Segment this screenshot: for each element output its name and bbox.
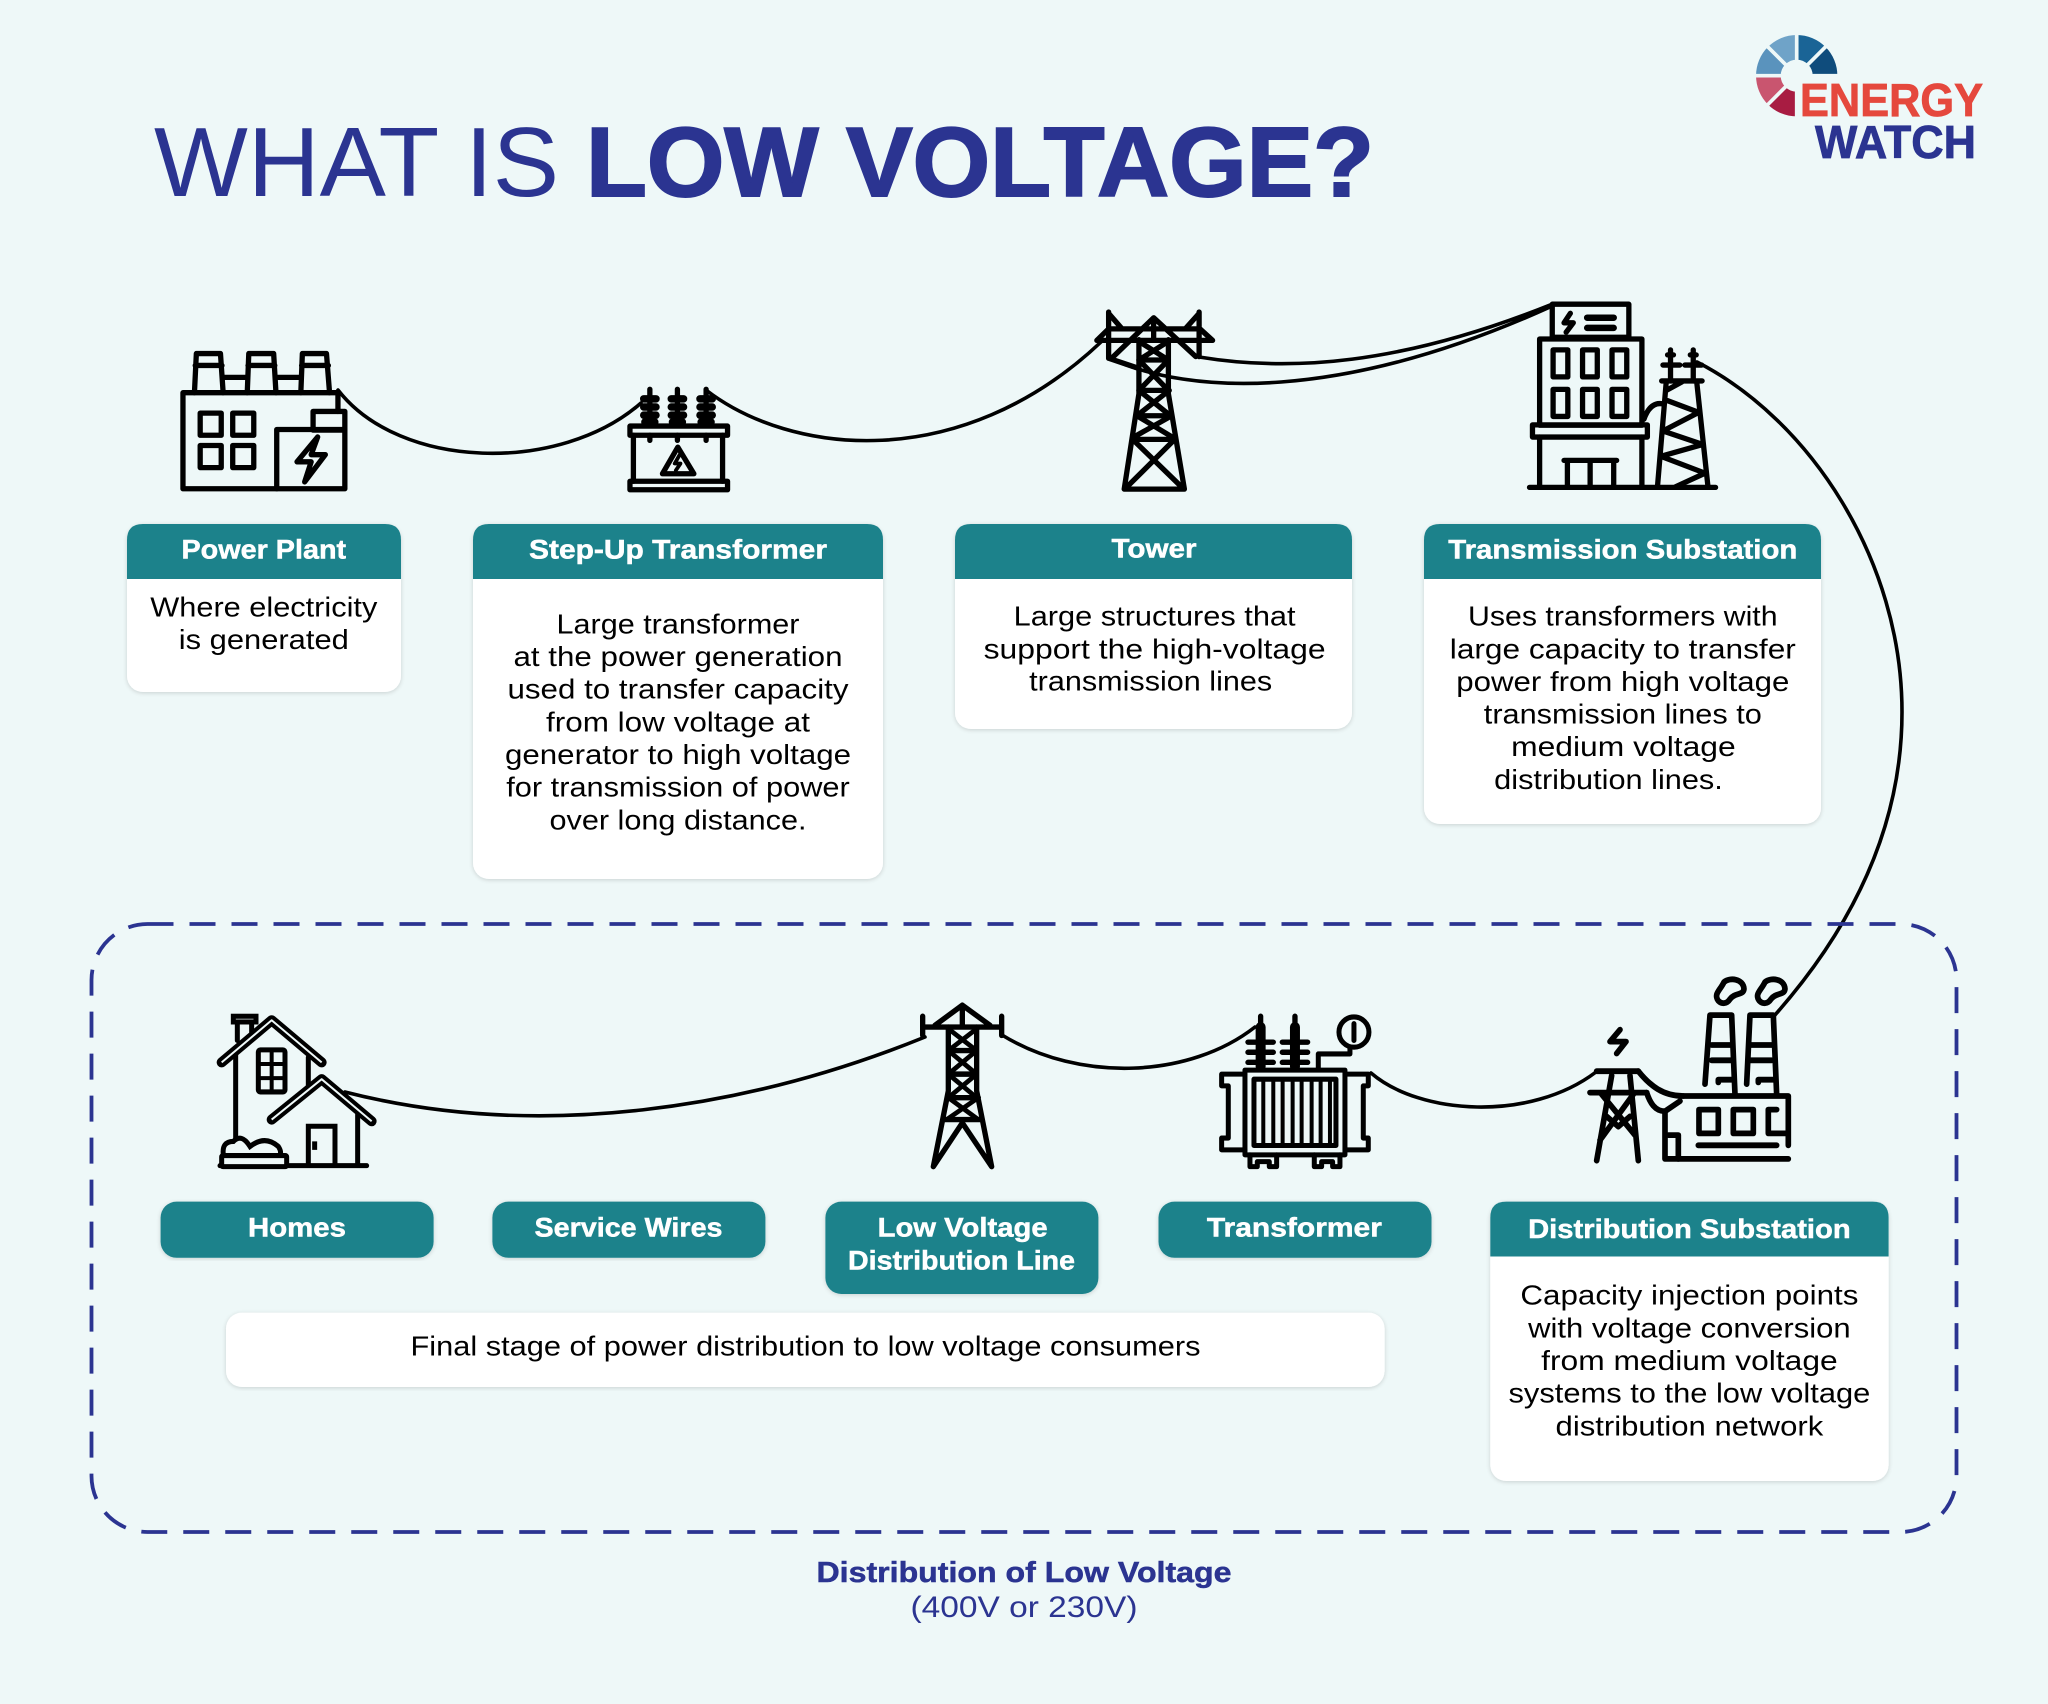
wire: power plant to step-up transformer (338, 390, 641, 453)
label: transformer: Transformer (1207, 1213, 1382, 1243)
text: step-up transformer description: for transmission of power (506, 772, 850, 803)
text: step-up transformer description (505, 609, 851, 835)
label: low voltage distribution line: Distribution Line (848, 1246, 1075, 1276)
text: distribution substation description: systems to the low voltage (1508, 1378, 1870, 1409)
text: step-up transformer description: generator to high voltage (505, 739, 851, 770)
wires: tower to transmission substation (1109, 305, 1550, 383)
heading: tower: Tower (1112, 534, 1197, 564)
logo ring icon (1753, 32, 1840, 119)
text: power plant description: is generated (179, 624, 349, 655)
text: tower description: Large structures that (1014, 601, 1296, 632)
text: tower description (984, 601, 1326, 697)
text: tower description: transmission lines (1029, 666, 1272, 697)
text: distribution substation description (1508, 1280, 1870, 1441)
icon: transmission substation (1530, 304, 1716, 487)
text: distribution substation description: Capacity injection points (1520, 1280, 1858, 1311)
icon: step-up transformer (630, 389, 728, 490)
text: transmission substation description: medium voltage (1511, 731, 1736, 762)
caption: distribution of low voltage: (400V or 230V) (910, 1591, 1138, 1624)
wire: step-up transformer to tower (706, 342, 1101, 441)
title: WHAT IS (154, 107, 559, 217)
text: transmission substation description: large capacity to transfer (1450, 633, 1796, 664)
label: homes: Homes (248, 1213, 346, 1243)
panel: distribution of low voltage dashed boundary (92, 924, 1956, 1532)
logo: Energy Watch: WATCH (1815, 116, 1976, 168)
title (154, 107, 1374, 217)
caption: distribution of low voltage (816, 1557, 1232, 1624)
text: transmission substation description: power from high voltage (1456, 666, 1789, 697)
wire: distribution substation to transformer (1371, 1072, 1596, 1107)
panel: transmission substation (1424, 524, 1821, 824)
text: transmission substation description: distribution lines. (1494, 764, 1723, 795)
title: LOW VOLTAGE? (586, 107, 1374, 217)
text: transmission substation description: Uses transformers with (1468, 601, 1778, 632)
icon: tower (1097, 312, 1213, 489)
text: power plant description (150, 592, 377, 655)
text: step-up transformer description: used to transfer capacity (508, 674, 848, 705)
label: service wires: Service Wires (534, 1213, 722, 1243)
heading: power plant: Power Plant (182, 535, 346, 565)
text: distribution substation description: distribution network (1556, 1410, 1824, 1441)
text: transmission substation description: transmission lines to (1484, 699, 1762, 730)
text: tower description: support the high-voltage (984, 633, 1326, 664)
logo: Energy Watch: ENERGY (1800, 74, 1983, 126)
label: low voltage distribution line: Low Voltage (878, 1213, 1048, 1243)
label: service wires (492, 1202, 765, 1258)
heading: step-up transformer: Step-Up Transformer (529, 535, 828, 565)
panel: power plant (127, 524, 401, 692)
heading: distribution substation: Distribution Substation (1528, 1214, 1851, 1244)
panel: tower (955, 524, 1352, 729)
panel: distribution substation (1490, 1202, 1889, 1481)
text: step-up transformer description: from low voltage at (546, 706, 810, 737)
wire: transmission substation to distribution substation (1697, 362, 1902, 1015)
label: transformer (1158, 1202, 1432, 1258)
wire: low voltage tower to homes (345, 1037, 925, 1116)
icon: power plant (183, 354, 345, 489)
text: distribution substation description: from medium voltage (1541, 1345, 1838, 1376)
text: power plant description: Where electricity (150, 592, 377, 623)
icon: transformer (1222, 1016, 1369, 1167)
icon: low voltage tower (923, 1005, 1002, 1167)
text: transmission substation description (1450, 601, 1796, 795)
text: step-up transformer description: over long distance. (550, 804, 806, 835)
icon: distribution substation (1590, 979, 1788, 1161)
text: step-up transformer description: at the power generation (514, 641, 842, 672)
text: distribution substation description: with voltage conversion (1527, 1313, 1851, 1344)
logo: Energy Watch (1753, 32, 1983, 168)
callout: final stage description: Final stage of power distribution to low voltage consumers (410, 1331, 1200, 1362)
panel: step-up transformer (473, 524, 883, 879)
caption: distribution of low voltage: Distribution of Low Voltage (816, 1557, 1232, 1589)
icon: homes (220, 1016, 372, 1167)
text: step-up transformer description: Large transformer (556, 609, 800, 640)
heading: transmission substation: Transmission Substation (1448, 535, 1797, 565)
wire: transformer to low voltage tower (1002, 1027, 1255, 1068)
label: homes (161, 1202, 434, 1258)
label: low voltage distribution line (825, 1202, 1098, 1294)
callout: final stage description (226, 1313, 1385, 1387)
